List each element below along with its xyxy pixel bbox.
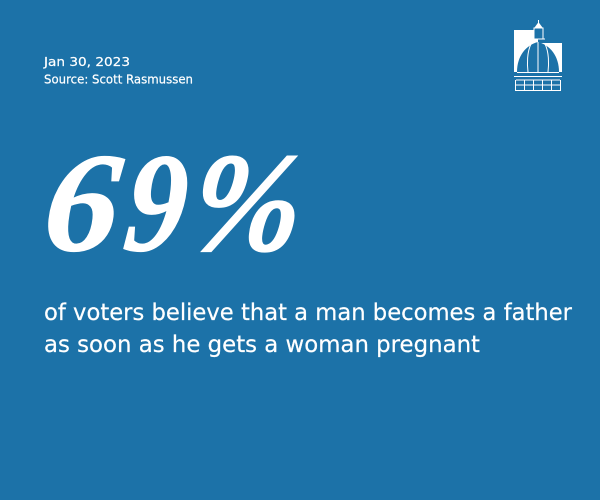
big statistic: 6 <box>38 124 129 281</box>
date and source text: Source: Scott Rasmussen <box>44 72 193 86</box>
date and source text: Jan 30, 2023 <box>43 55 130 69</box>
statement text: as soon as he gets a woman pregnant <box>44 332 480 358</box>
big statistic: % <box>186 124 310 281</box>
big statistic <box>38 124 310 281</box>
statement text: of voters believe that a man becomes a father <box>44 300 573 326</box>
statement text <box>44 300 573 358</box>
icon: capitol dome logo <box>514 20 562 91</box>
date and source text <box>43 55 193 86</box>
big statistic: 9 <box>119 124 195 281</box>
